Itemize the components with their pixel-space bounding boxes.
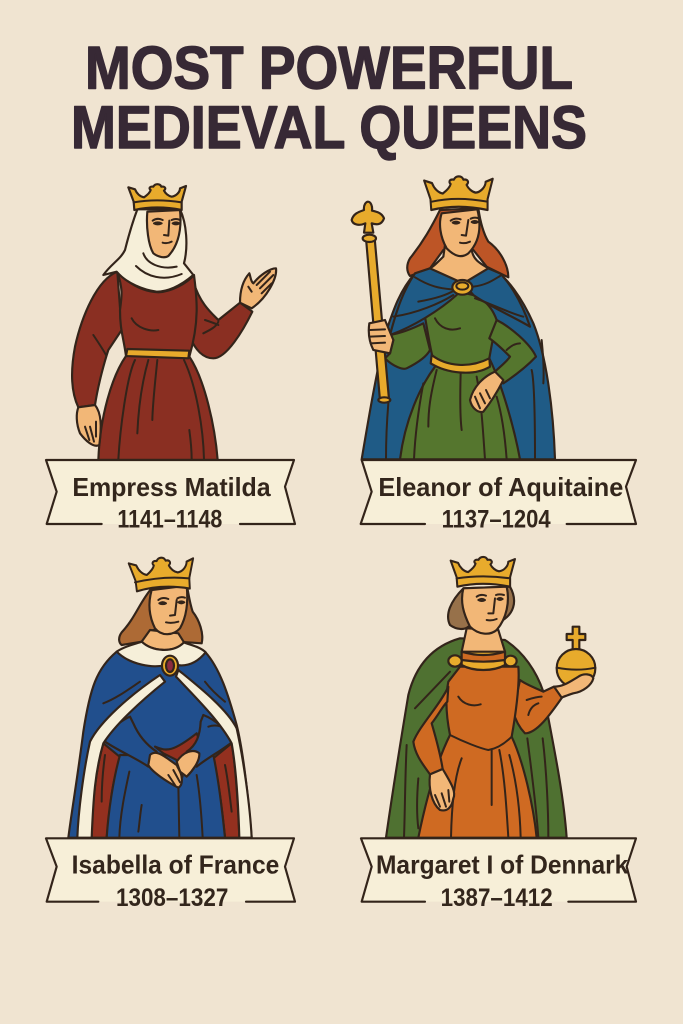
banner: Empress Matilda: [46, 460, 295, 534]
clasp: [162, 656, 178, 676]
figure: Isabella of France: [68, 556, 252, 838]
left arm: [385, 323, 430, 369]
gown skirt: [107, 755, 225, 838]
banner: Isabella of France: Isabella of France: [72, 849, 279, 879]
icon: orb with cross: [557, 627, 595, 688]
banner: Eleanor of Aquitaine: 1137–1204: [442, 506, 551, 534]
hand: holding sceptre: [369, 320, 393, 353]
icon: crown: [451, 557, 515, 587]
white trim: [77, 675, 165, 838]
collar: [462, 652, 505, 670]
banner: Margaret I of Dennark: [361, 838, 636, 912]
panel: Margaret I of Dennark: [361, 557, 636, 912]
panel: Empress Matilda: [46, 184, 295, 534]
icon: crown: [424, 176, 493, 210]
hand: at waist: [470, 372, 503, 412]
hand: lowered: [77, 405, 101, 446]
collar: [117, 642, 206, 666]
banner: Empress Matilda: Empress Matilda: [72, 472, 271, 502]
banner: Eleanor of Aquitaine: [361, 460, 636, 534]
clasp: [452, 280, 472, 295]
banner: Empress Matilda: 1141–1148: [117, 506, 222, 534]
banner: Eleanor of Aquitaine: Eleanor of Aquitaine: [378, 472, 623, 502]
right arm: [489, 320, 536, 383]
title: [71, 34, 587, 161]
title: MOST POWERFUL: [85, 34, 573, 102]
banner: Isabella of France: 1308–1327: [116, 884, 228, 912]
icon: crown: [128, 556, 195, 592]
banner: Margaret I of Dennark: 1387–1412: [441, 884, 553, 912]
cloak drape: [390, 268, 463, 335]
icon: sceptre: [352, 202, 390, 403]
figure: Empress Matilda: [72, 184, 276, 460]
panel: Isabella of France: [46, 556, 295, 912]
hand: holding orb: [554, 674, 593, 698]
panel: Eleanor of Aquitaine: [352, 176, 636, 534]
banner: Isabella of France: [46, 838, 295, 912]
banner: Margaret I of Dennark: Margaret I of Dennark: [376, 849, 629, 879]
hand: raised: [240, 268, 276, 308]
figure: Margaret I of Dennark: [386, 557, 595, 838]
hands: folded: [177, 751, 199, 777]
hand: lowered: [430, 769, 454, 810]
icon: crown: [128, 184, 186, 210]
figure: Eleanor of Aquitaine: [352, 176, 555, 459]
title: MEDIEVAL QUEENS: [71, 94, 587, 161]
